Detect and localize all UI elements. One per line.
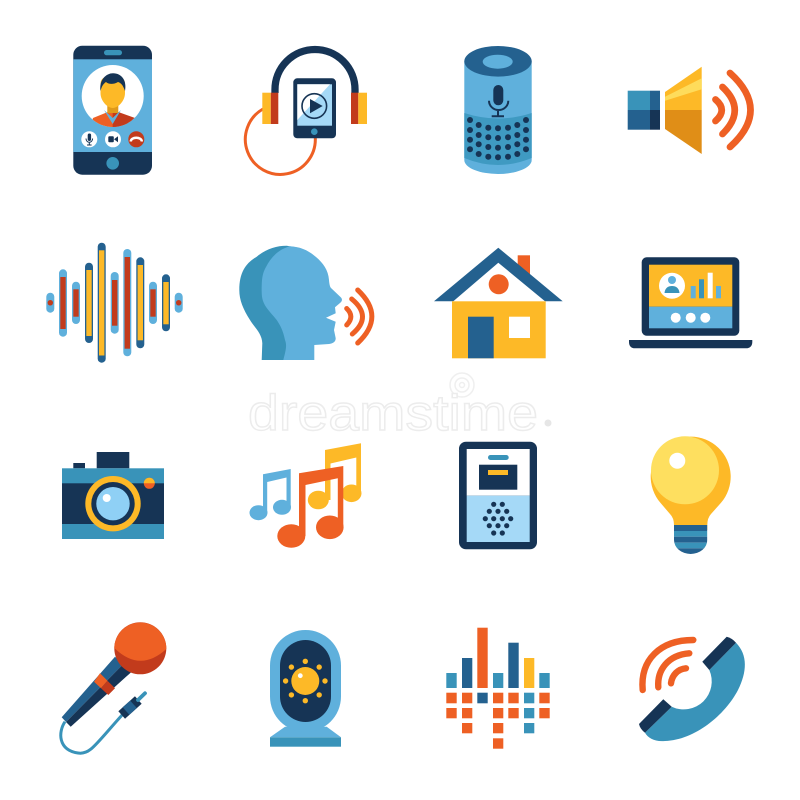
- avatar: [82, 65, 144, 130]
- icon: house: [434, 248, 563, 358]
- user avatar: [659, 273, 685, 299]
- audio jack: [122, 693, 145, 715]
- speaker grille: [464, 113, 532, 165]
- media player: [293, 78, 336, 138]
- icon: smart speaker: [464, 46, 532, 174]
- icon: camera: [62, 452, 164, 539]
- icon: speaking head: [239, 246, 372, 360]
- icon: headphones and media player: [245, 50, 367, 174]
- signal waves: [642, 640, 693, 690]
- bar chart: [691, 273, 721, 298]
- sound waves: [716, 73, 750, 147]
- speech waves: [347, 290, 372, 343]
- icon: loudspeaker: [628, 67, 750, 154]
- icon: round speaker: [270, 630, 341, 747]
- icon grid: [46, 46, 754, 755]
- icon: laptop: [629, 257, 752, 348]
- icon: music notes: [250, 443, 362, 548]
- icon: smartphone video call: [73, 46, 152, 175]
- microphone glyph: [489, 85, 508, 116]
- icon: microphone: [61, 622, 166, 753]
- icon: intercom: [459, 442, 537, 549]
- level squares: [446, 693, 550, 749]
- icon: light bulb: [651, 436, 731, 554]
- icon: equalizer: [446, 628, 550, 749]
- watermark: dreamstime: [248, 385, 538, 441]
- sun rays: [283, 659, 328, 703]
- icon: audio waveform: [46, 243, 183, 363]
- icon: telephone handset: [639, 637, 745, 741]
- speaker dots: [483, 502, 513, 536]
- bulb base: [674, 525, 707, 554]
- call buttons: [81, 131, 144, 147]
